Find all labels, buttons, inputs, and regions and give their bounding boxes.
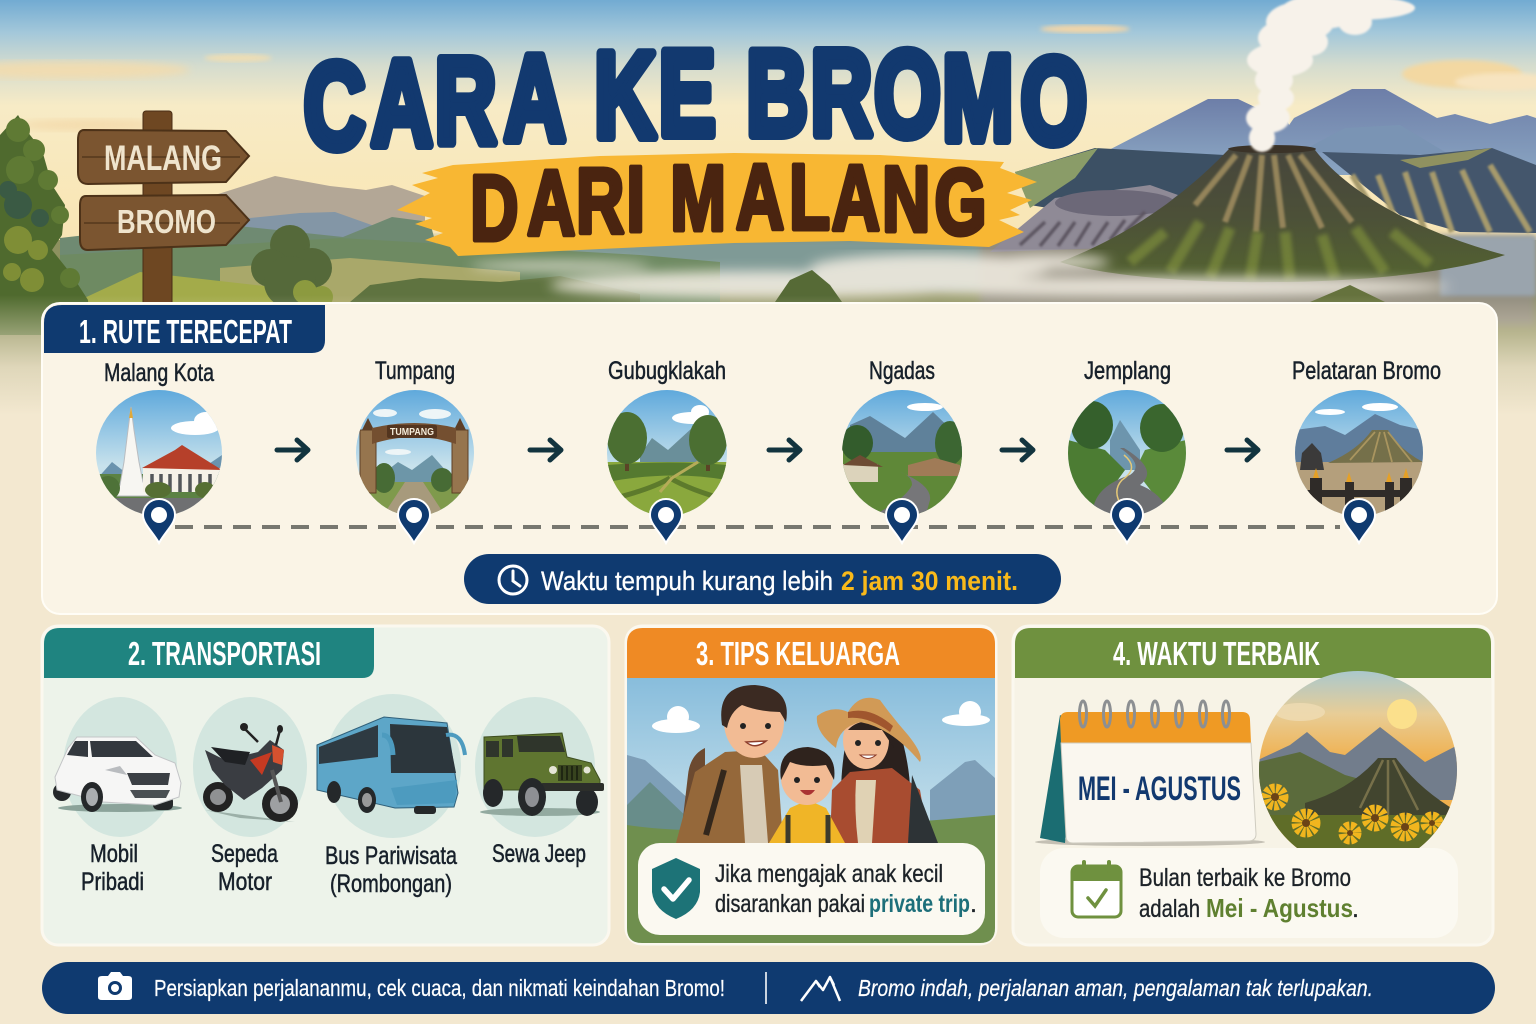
stop image: Pelataran Bromo — [1295, 390, 1423, 518]
Bromo cone — [1060, 145, 1505, 282]
vehicle: car — [53, 697, 182, 837]
vehicle: tour bus — [317, 694, 465, 838]
vehicle labels: Sepeda — [211, 840, 278, 868]
panel: 4 waktu terbaik — [1013, 626, 1493, 945]
panel: 1 rute tercepat — [42, 303, 1497, 614]
subtitle banner: MALANG — [670, 146, 987, 255]
calendar: MEI - AGUSTUS — [1078, 770, 1241, 808]
icon: calendar check — [1072, 862, 1121, 917]
vehicle labels: Motor — [218, 868, 272, 896]
subtitle banner: DARI — [470, 148, 645, 261]
stop labels: Pelataran Bromo — [1292, 357, 1441, 385]
subtitle banner — [397, 146, 1037, 261]
icon: mountains — [801, 977, 840, 1001]
best month card: adalah — [1139, 895, 1200, 923]
stop labels: Jemplang — [1084, 357, 1171, 385]
vehicle labels: Pribadi — [81, 868, 144, 896]
stop labels: Ngadas — [869, 357, 935, 385]
tip card: private trip — [869, 890, 970, 918]
travel time pill: 2 jam 30 menit. — [841, 566, 1018, 596]
heading: tips keluarga — [627, 628, 995, 678]
tip card — [638, 843, 985, 935]
title: BROMO — [746, 26, 1087, 170]
vehicle: jeep — [475, 697, 604, 837]
dashed route line — [175, 525, 1340, 529]
tip card: . — [970, 890, 977, 918]
heading: transportasi: 2. TRANSPORTASI — [128, 635, 321, 672]
icon: clock — [499, 566, 527, 594]
footer bar: Persiapkan perjalananmu, cek cuaca, dan nikmati keindahan Bromo! — [154, 975, 725, 1001]
volcanic smoke plume — [1246, 0, 1415, 152]
travel time pill — [464, 554, 1061, 604]
vehicle labels — [81, 840, 586, 898]
stop image: Gubugklakah fields — [607, 390, 727, 518]
sign: Bromo — [80, 195, 249, 250]
ground base — [0, 236, 1536, 415]
stop image: Tumpang gate: TUMPANG — [390, 427, 434, 438]
sign: Malang — [78, 130, 249, 184]
heading: rute terecepat: 1. RUTE TERECEPAT — [79, 313, 292, 350]
travel time pill: Waktu tempuh kurang lebih — [541, 566, 833, 596]
father — [676, 685, 787, 843]
route arrows — [277, 440, 1258, 460]
icon: camera — [98, 972, 132, 1000]
left trees — [0, 115, 333, 335]
family illustration — [627, 678, 995, 944]
fog band and tree line — [350, 254, 1450, 305]
title — [304, 26, 1087, 175]
child — [769, 747, 845, 843]
stop labels: Tumpang — [375, 357, 455, 385]
vehicle labels: Sewa Jeep — [492, 840, 586, 868]
heading: transportasi — [44, 628, 374, 678]
stop image: Malang Kota — [96, 390, 224, 518]
vehicle: motorcycle — [193, 697, 307, 837]
title: KE — [594, 26, 716, 164]
footer bar — [42, 962, 1495, 1014]
icon: shield — [652, 858, 700, 919]
heading: waktu terbaik — [1015, 628, 1491, 678]
stop image: Jemplang road — [1068, 390, 1186, 518]
best month card — [1040, 848, 1458, 938]
best month card: Bulan terbaik ke Bromo — [1139, 864, 1351, 892]
title: CARA — [304, 31, 566, 175]
sign: Malang: MALANG — [104, 139, 222, 178]
vehicle labels: (Rombongan) — [330, 870, 452, 898]
distant left hills — [60, 176, 720, 310]
tip card: Jika mengajak anak kecil — [715, 860, 943, 888]
heading: waktu terbaik: 4. WAKTU TERBAIK — [1113, 635, 1320, 672]
stop labels: Gubugklakah — [608, 357, 726, 385]
stop labels: Malang Kota — [104, 359, 214, 387]
stop image: Ngadas village — [841, 390, 965, 518]
vehicle labels: Mobil — [90, 840, 138, 868]
panel: 2 transportasi — [42, 626, 609, 945]
panel: 3 tips keluarga — [626, 626, 996, 944]
heading: rute terecepat — [44, 305, 325, 353]
vehicle labels: Bus Pariwisata — [325, 842, 457, 870]
signpost — [78, 111, 249, 306]
best month card: Mei - Agustus — [1206, 893, 1353, 923]
mother — [817, 698, 938, 843]
sign: Bromo: BROMO — [117, 203, 216, 240]
best month card: . — [1352, 895, 1359, 923]
stop image: Tumpang gate — [356, 390, 474, 522]
route pins — [143, 499, 1375, 543]
stop labels — [104, 357, 1441, 387]
volcano mountains — [990, 89, 1536, 252]
sunrise Bromo image — [1259, 671, 1457, 848]
calendar — [1035, 701, 1265, 846]
heading: tips keluarga: 3. TIPS KELUARGA — [696, 635, 900, 672]
tip card: disarankan pakai — [715, 890, 865, 918]
footer bar: Bromo indah, perjalanan aman, pengalaman tak terlupakan. — [858, 975, 1373, 1001]
